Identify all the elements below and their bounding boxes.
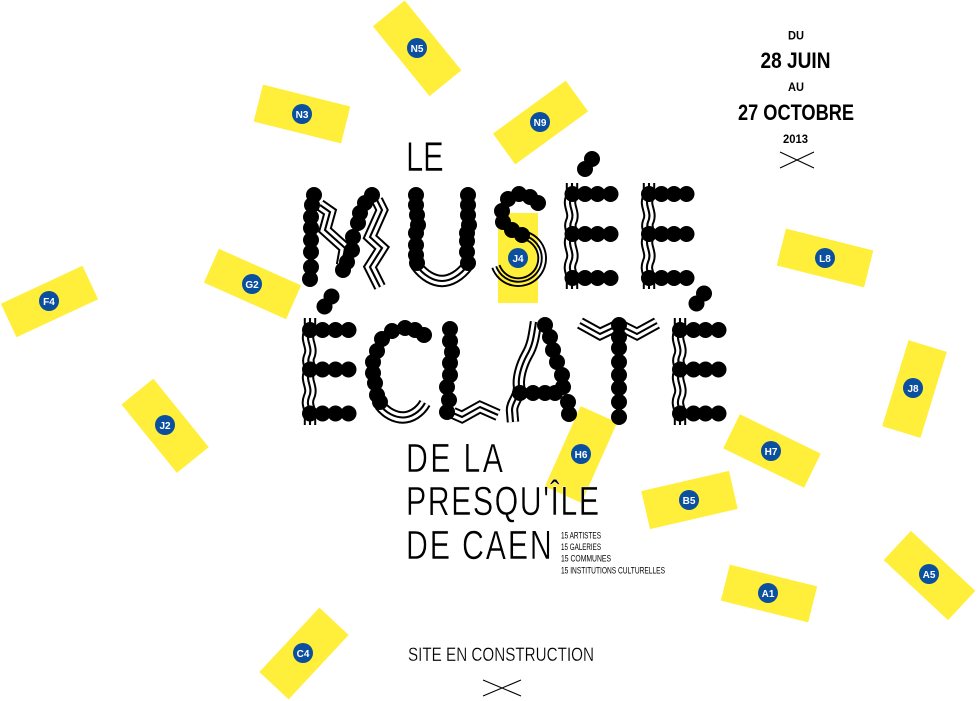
letter E bbox=[641, 183, 694, 289]
yellow tag: A1 bbox=[721, 565, 817, 622]
list of figures: 15 GALERIES bbox=[561, 542, 601, 552]
yellow tag: N3: N3 bbox=[296, 110, 309, 121]
date block: 27 OCTOBRE bbox=[738, 100, 854, 125]
title word: MUSÉE, bbox=[302, 151, 694, 289]
yellow tag: J8: J8 bbox=[907, 384, 919, 395]
yellow tag: A1: A1 bbox=[762, 589, 775, 600]
letter C bbox=[365, 320, 432, 418]
yellow tag: N3 bbox=[254, 85, 350, 143]
yellow tag: J2: J2 bbox=[159, 421, 171, 432]
date block: DU bbox=[788, 28, 804, 42]
subtitle: DE CAEN: DE CAEN bbox=[406, 521, 552, 568]
date block: 2013 bbox=[783, 132, 808, 146]
yellow tag: J2 bbox=[121, 379, 209, 473]
list of figures: 15 ARTISTES bbox=[561, 530, 601, 540]
icon: cross at bottom bbox=[483, 680, 521, 696]
list of figures: 15 INSTITUTIONS CULTURELLES bbox=[561, 566, 665, 576]
list of figures: 15 COMMUNES bbox=[561, 554, 611, 564]
yellow tag: L8: L8 bbox=[819, 254, 831, 265]
date block bbox=[738, 28, 854, 146]
yellow tag: H6 bbox=[545, 406, 617, 503]
letter M bbox=[302, 187, 382, 287]
date block: 28 JUIN bbox=[760, 48, 830, 73]
yellow tag: B5: B5 bbox=[683, 496, 696, 507]
yellow tag: F4: F4 bbox=[43, 297, 55, 308]
yellow tag: H7: H7 bbox=[765, 447, 778, 458]
date block: AU bbox=[788, 80, 804, 94]
yellow tag: G2 bbox=[204, 249, 301, 319]
letter É final bbox=[672, 286, 726, 425]
yellow tag: J8 bbox=[882, 340, 947, 438]
letter S bbox=[492, 186, 546, 286]
yellow tag: J4: J4 bbox=[512, 254, 524, 265]
subtitle: DE LA: DE LA bbox=[406, 434, 503, 481]
letter U bbox=[408, 187, 477, 281]
yellow tag: N9 bbox=[493, 81, 588, 164]
yellow tag: J4 bbox=[498, 213, 538, 303]
letter É bbox=[302, 288, 356, 425]
yellow tag: A5 bbox=[884, 531, 975, 620]
yellow tag: H6: H6 bbox=[575, 450, 588, 461]
letter T bbox=[580, 317, 657, 425]
list of figures bbox=[561, 530, 665, 576]
yellow tag: F4 bbox=[1, 266, 98, 337]
title word: ÉCLATÉ bbox=[302, 286, 726, 425]
icon: cross under date bbox=[780, 152, 814, 168]
yellow tag: N5: N5 bbox=[411, 44, 424, 55]
yellow tag: N9: N9 bbox=[534, 118, 547, 129]
title word: LE: LE bbox=[406, 133, 444, 180]
yellow tag: C4 bbox=[259, 608, 349, 699]
site status text: SITE EN CONSTRUCTION bbox=[408, 644, 594, 666]
yellow tag: L8 bbox=[777, 229, 873, 287]
yellow tag: H7 bbox=[723, 414, 821, 488]
letter É bbox=[564, 151, 618, 289]
subtitle: PRESQU'ÎLE: PRESQU'ÎLE bbox=[406, 477, 599, 524]
yellow tag: N5 bbox=[373, 0, 461, 96]
letter A bbox=[512, 317, 577, 422]
yellow tag: A5: A5 bbox=[923, 570, 936, 581]
letter L bbox=[439, 321, 498, 420]
yellow tag: B5 bbox=[641, 471, 738, 529]
yellow tag: G2: G2 bbox=[245, 280, 259, 291]
yellow tag: C4: C4 bbox=[297, 649, 310, 660]
